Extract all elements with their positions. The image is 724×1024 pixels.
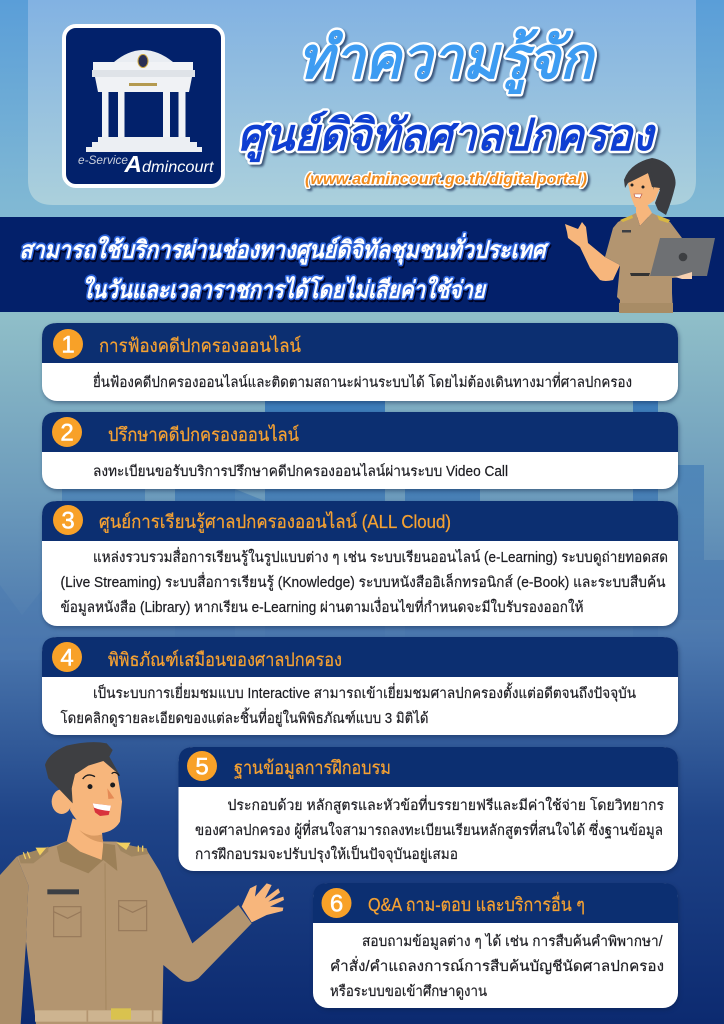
title: ศูนย์ดิจิทัลศาลปกครอง: [238, 110, 656, 163]
face and hair front: [628, 173, 660, 207]
collar: [57, 841, 117, 873]
uniform: [605, 213, 683, 313]
card 4: [42, 637, 678, 735]
body 4: โดยคลิกดูรายละเอียดของแต่ละชิ้นที่อยู่ในพิพิธภัณฑ์แบบ 3 มิติได้: [60, 707, 428, 727]
illustration: woman with laptop: [565, 158, 715, 313]
name tag: [47, 889, 79, 894]
number 4: 4: [60, 644, 74, 672]
neck: [636, 204, 652, 226]
epaulettes: [18, 847, 48, 863]
title: (www.admincourt.go.th/digitalportal): [305, 171, 587, 188]
placket: [103, 863, 107, 1010]
logo text: e-Service: [78, 155, 128, 167]
number 1: 1: [61, 332, 75, 358]
mouth: [93, 803, 111, 816]
arm and pointing hand: [565, 222, 620, 281]
epaulettes and name tag: [620, 215, 633, 222]
body 3: แหล่งรวบรวมสื่อการเรียนรู้ในรูปแบบต่าง ๆ เช่น ระบบเรียนออนไลน์ (e-Learning) ระบบดูถ่ายทอดสด: [93, 547, 668, 566]
body 4: เป็นระบบการเยี่ยมชมแบบ Interactive สามารถเข้าเยี่ยมชมศาลปกครองตั้งแต่อดีตจนถึงปัจจุบัน: [93, 682, 636, 702]
number 1: [53, 329, 83, 359]
number 6: 6: [330, 890, 343, 918]
number 5: [187, 751, 217, 781]
body 6: หรือระบบขอเข้าศึกษาดูงาน: [330, 983, 487, 1000]
heading 4: พิพิธภัณฑ์เสมือนของศาลปกครอง: [108, 649, 342, 670]
body 6: สอบถามข้อมูลต่าง ๆ ได้ เช่น การสืบค้นคำพิพากษา/: [362, 932, 663, 950]
number 2: 2: [60, 420, 74, 446]
body 5: ประกอบด้วย หลักสูตรและหัวข้อที่บรรยายฟรีและมีค่าใช้จ่าย โดยวิทยากร: [228, 795, 664, 814]
hand: [242, 883, 284, 922]
body 2: ลงทะเบียนขอรับบริการปรึกษาคดีปกครองออนไลน์ผ่านระบบ Video Call: [93, 462, 508, 480]
city skyline: [0, 400, 724, 660]
hair: [45, 742, 119, 803]
band text: ในวันและเวลาราชการได้โดยไม่เสียค่าใช้จ่าย: [82, 275, 487, 304]
heading 5: ฐานข้อมูลการฝึกอบรม: [234, 757, 391, 779]
card 3: [42, 501, 678, 626]
body 5: [195, 795, 664, 863]
body 1: ยื่นฟ้องคดีปกครองออนไลน์และติดตามสถานะผ่านระบบได้ โดยไม่ต้องเดินทางมาที่ศาลปกครอง: [93, 372, 632, 391]
number 3: [53, 505, 83, 535]
number 2: [52, 417, 82, 447]
card 6: [313, 883, 678, 1008]
body 3: [60, 547, 668, 616]
body 6: คำสั่ง/คำแถลงการณ์การสืบค้นบัญชีนัดศาลปกครอง: [330, 956, 664, 975]
ear: [52, 789, 72, 814]
pockets: [54, 901, 147, 937]
heading 2: ปรึกษาคดีปกครองออนไลน์: [108, 424, 299, 445]
band text: สามารถใช้บริการผ่านช่องทางศูนย์ดิจิทัลชุมชนทั่วประเทศ: [20, 232, 550, 265]
belt: [35, 1010, 162, 1022]
body 4: [60, 682, 636, 727]
heading 1: การฟ้องคดีปกครองออนไลน์: [99, 335, 301, 356]
top panel: [28, 0, 696, 205]
face: [70, 758, 122, 833]
icon: court building: [86, 50, 202, 152]
number 5: 5: [195, 754, 209, 780]
laptop: [650, 238, 715, 276]
card 2: [42, 412, 678, 489]
body 3: (Live Streaming) ระบบสื่อการเรียนรู้ (Knowledge) ระบบหนังสืออิเล็กทรอนิกส์ (e-Book) และระบบสืบค้น: [60, 572, 666, 591]
navy band: [0, 217, 724, 312]
number 3: 3: [61, 508, 75, 534]
body 6: [330, 932, 664, 1000]
body 5: ของศาลปกครอง ผู้ที่สนใจสามารถลงทะเบียนเรียนหลักสูตรที่สนใจได้ ซึ่งฐานข้อมูล: [195, 820, 663, 839]
illustration: man in uniform: [0, 742, 284, 1024]
title: [238, 26, 656, 188]
eyes and brows: [87, 784, 92, 789]
logo: e-Service Admincourt: [64, 26, 223, 186]
number 4: [52, 642, 82, 672]
logo: e-Service Admincourt: Admincourt: [123, 151, 214, 177]
body 5: การฝึกอบรมจะปรับปรุงให้เป็นปัจจุบันอยู่เสมอ: [195, 844, 458, 863]
heading 6: Q&A ถาม-ตอบ และบริการอื่น ๆ: [368, 892, 585, 915]
trousers: [619, 303, 673, 313]
card 5: [178, 747, 678, 871]
band text: [20, 232, 550, 304]
heading 3: ศูนย์การเรียนรู้ศาลปกครองออนไลน์ (ALL Cloud): [99, 511, 451, 533]
hair back: [624, 158, 676, 215]
number 6: [322, 888, 352, 918]
title: ทำความรู้จัก: [298, 26, 596, 95]
neck: [67, 818, 103, 860]
nose: [107, 788, 114, 799]
body 3: ข้อมูลหนังสือ (Library) หากเรียน e-Learning ผ่านตามเงื่อนไขที่กำหนดจะมีใบรับรองออกให้: [60, 597, 584, 616]
card 1: [42, 323, 678, 401]
torso and right arm: [17, 841, 252, 1024]
left arm: [0, 857, 28, 1024]
